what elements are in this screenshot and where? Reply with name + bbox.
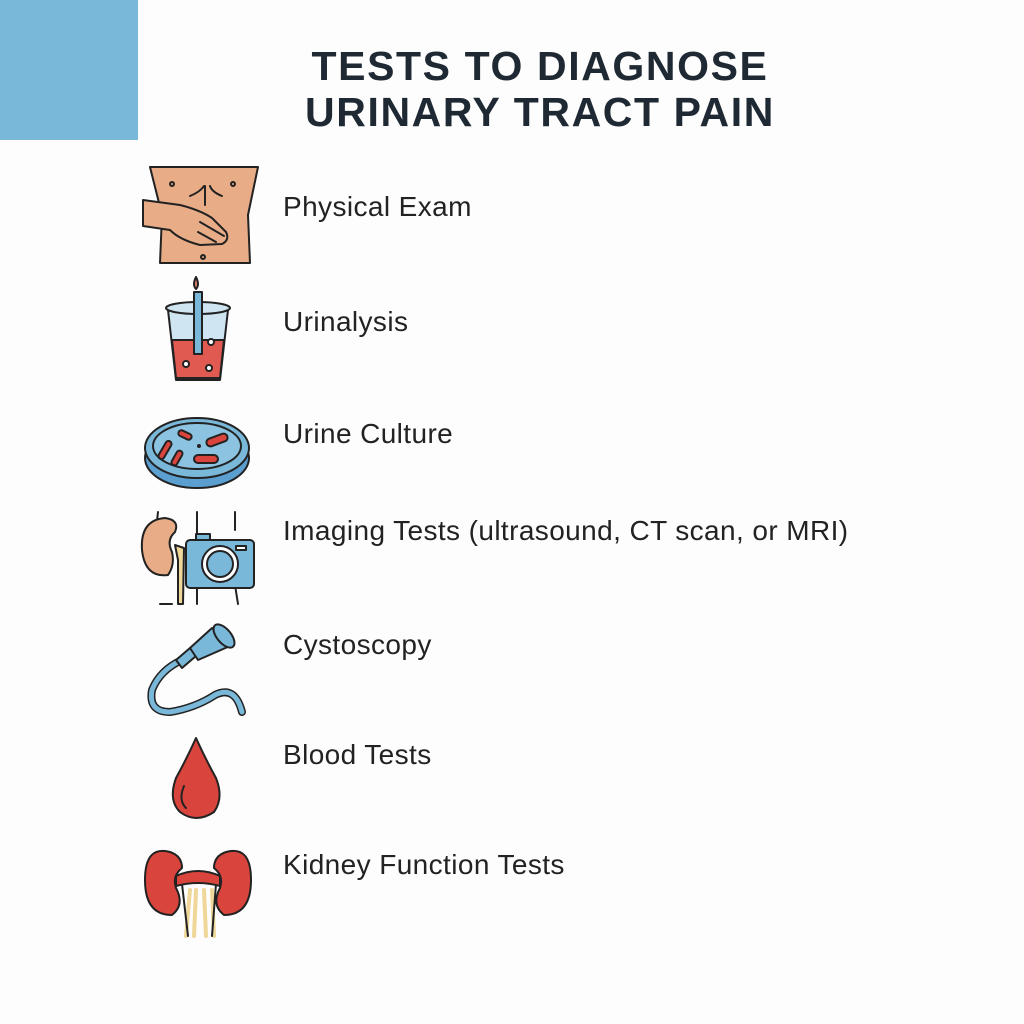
icon: kidney with camera — [142, 512, 254, 604]
icon: blood drop — [173, 738, 220, 818]
label: urine culture: Urine Culture — [283, 418, 453, 449]
icon: kidneys — [145, 851, 251, 936]
decorative corner square — [0, 0, 138, 140]
title: TESTS TO DIAGNOSE — [312, 43, 768, 89]
title — [305, 43, 775, 135]
label: kidney function tests: Kidney Function Tests — [283, 849, 565, 880]
label: physical exam: Physical Exam — [283, 191, 472, 222]
icon: petri dish — [145, 418, 249, 488]
icon: abdomen with hand — [143, 167, 258, 263]
label: cystoscopy: Cystoscopy — [283, 629, 432, 660]
icon: urine cup — [166, 277, 230, 380]
title: URINARY TRACT PAIN — [305, 89, 775, 135]
label: urinalysis: Urinalysis — [283, 306, 408, 337]
label: blood tests: Blood Tests — [283, 739, 432, 770]
icon: cystoscope — [151, 621, 242, 712]
label: imaging tests: Imaging Tests (ultrasound, CT scan, or MRI) — [283, 515, 848, 546]
